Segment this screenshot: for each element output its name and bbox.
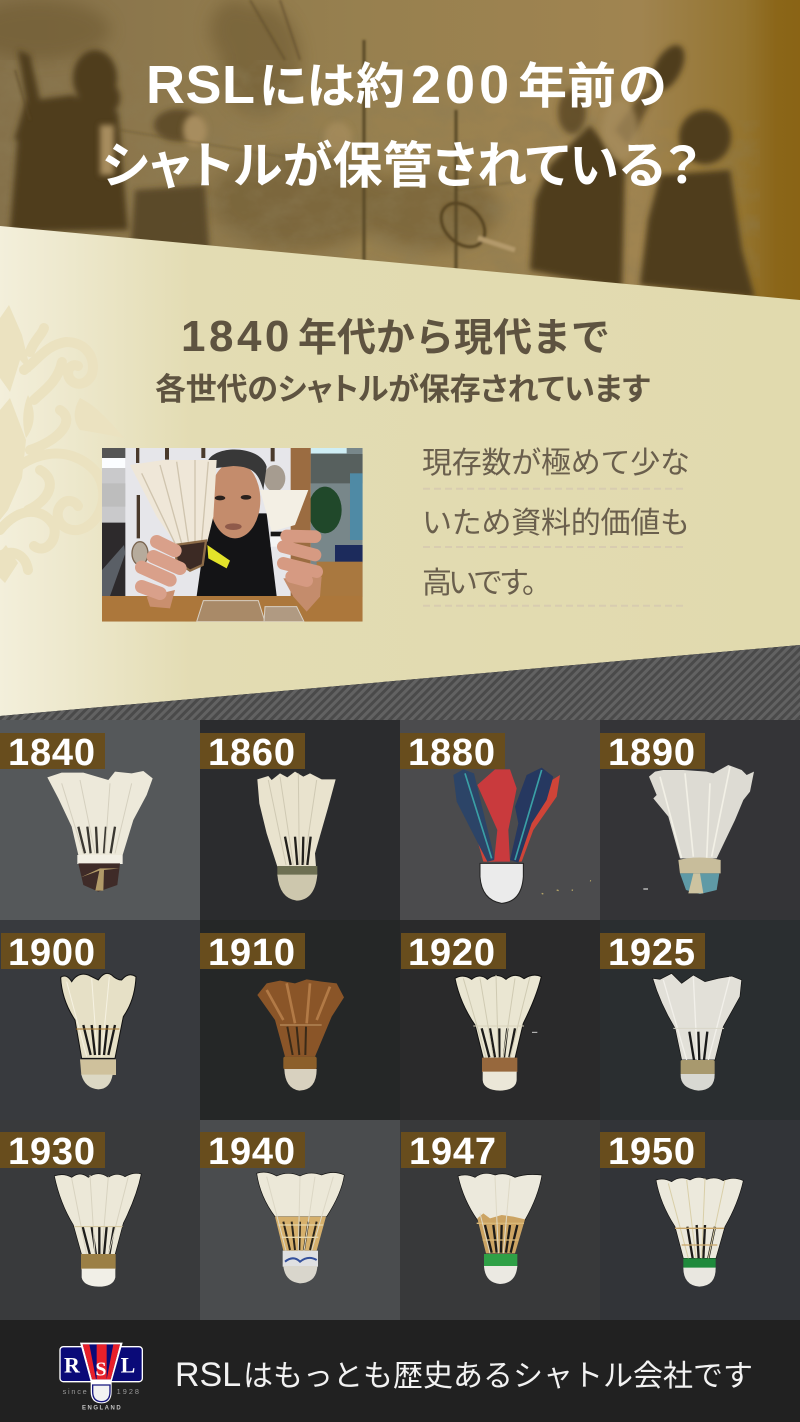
footer bar [0, 1320, 800, 1422]
cell: 1890 [600, 720, 800, 920]
raised racket [645, 40, 691, 96]
cell: 1925 [600, 920, 800, 1120]
title: には [259, 60, 355, 114]
icon: RSL logo: S [95, 1358, 106, 1380]
label: 1947: 1947 [409, 1131, 496, 1173]
title: シャトルが保管されている？ [102, 138, 700, 194]
icon: RSL logo: R [64, 1353, 81, 1378]
label: 1880: 1880 [408, 732, 495, 774]
heading: 1840 [181, 312, 293, 361]
cell: 1950 [600, 1120, 800, 1320]
right man [530, 125, 625, 290]
label: 1890: 1890 [608, 732, 695, 774]
icon: RSL logo [60, 1343, 142, 1412]
label: 1910: 1910 [208, 932, 295, 974]
cell: 1880 [400, 720, 600, 920]
ornament: damask fleur [0, 305, 124, 583]
cell: 1920 [400, 920, 600, 1120]
title: 年 [518, 60, 567, 114]
hatched diagonal band [0, 645, 800, 720]
footer tagline: RSL [175, 1356, 241, 1394]
right woman [679, 110, 731, 164]
label: 1930: 1930 [8, 1131, 95, 1173]
label: 1860: 1860 [208, 732, 295, 774]
label: 1925: 1925 [608, 932, 695, 974]
title: 200 [411, 55, 513, 115]
title: の [618, 60, 666, 114]
icon: RSL logo: since [63, 1387, 87, 1396]
title: 前 [567, 60, 616, 114]
body text: 高いです。 [422, 567, 552, 600]
heading: 年代から現代まで [298, 317, 610, 360]
cell: 1940 [200, 1120, 400, 1320]
cell: 1947 [400, 1120, 600, 1320]
cell: 1860 [200, 720, 400, 920]
left man [10, 95, 128, 232]
cell: 1910 [200, 920, 400, 1120]
cell: 1900 [0, 920, 200, 1120]
icon: RSL logo: 1928 [117, 1387, 139, 1396]
hero illustration background [0, 0, 800, 310]
label: 1940: 1940 [208, 1131, 295, 1173]
label: 1920: 1920 [408, 932, 495, 974]
label: 1840: 1840 [8, 732, 95, 774]
body text: いため資料的価値も [422, 507, 690, 540]
label: 1900: 1900 [8, 932, 95, 974]
panel: cream diagonal section [0, 226, 800, 716]
cell: 1930 [0, 1120, 200, 1320]
title: 約 [356, 60, 405, 114]
icon: RSL logo: L [121, 1353, 135, 1378]
body text [422, 447, 690, 606]
cell: 1840 [0, 720, 200, 920]
title [102, 55, 700, 194]
label: 1950: 1950 [608, 1131, 695, 1173]
body text: 現存数が極めて少な [422, 447, 690, 480]
icon: RSL logo: ENGLAND [82, 1406, 121, 1412]
subheading: 各世代のシャトルが保存されています [155, 372, 650, 407]
shuttlecock grid [0, 720, 800, 1320]
photo: man holding two shuttlecocks [102, 448, 363, 622]
title: RSL [146, 55, 256, 115]
woman seated [154, 109, 202, 141]
footer tagline: はもっとも歴史あるシャトル会社です [243, 1360, 753, 1393]
